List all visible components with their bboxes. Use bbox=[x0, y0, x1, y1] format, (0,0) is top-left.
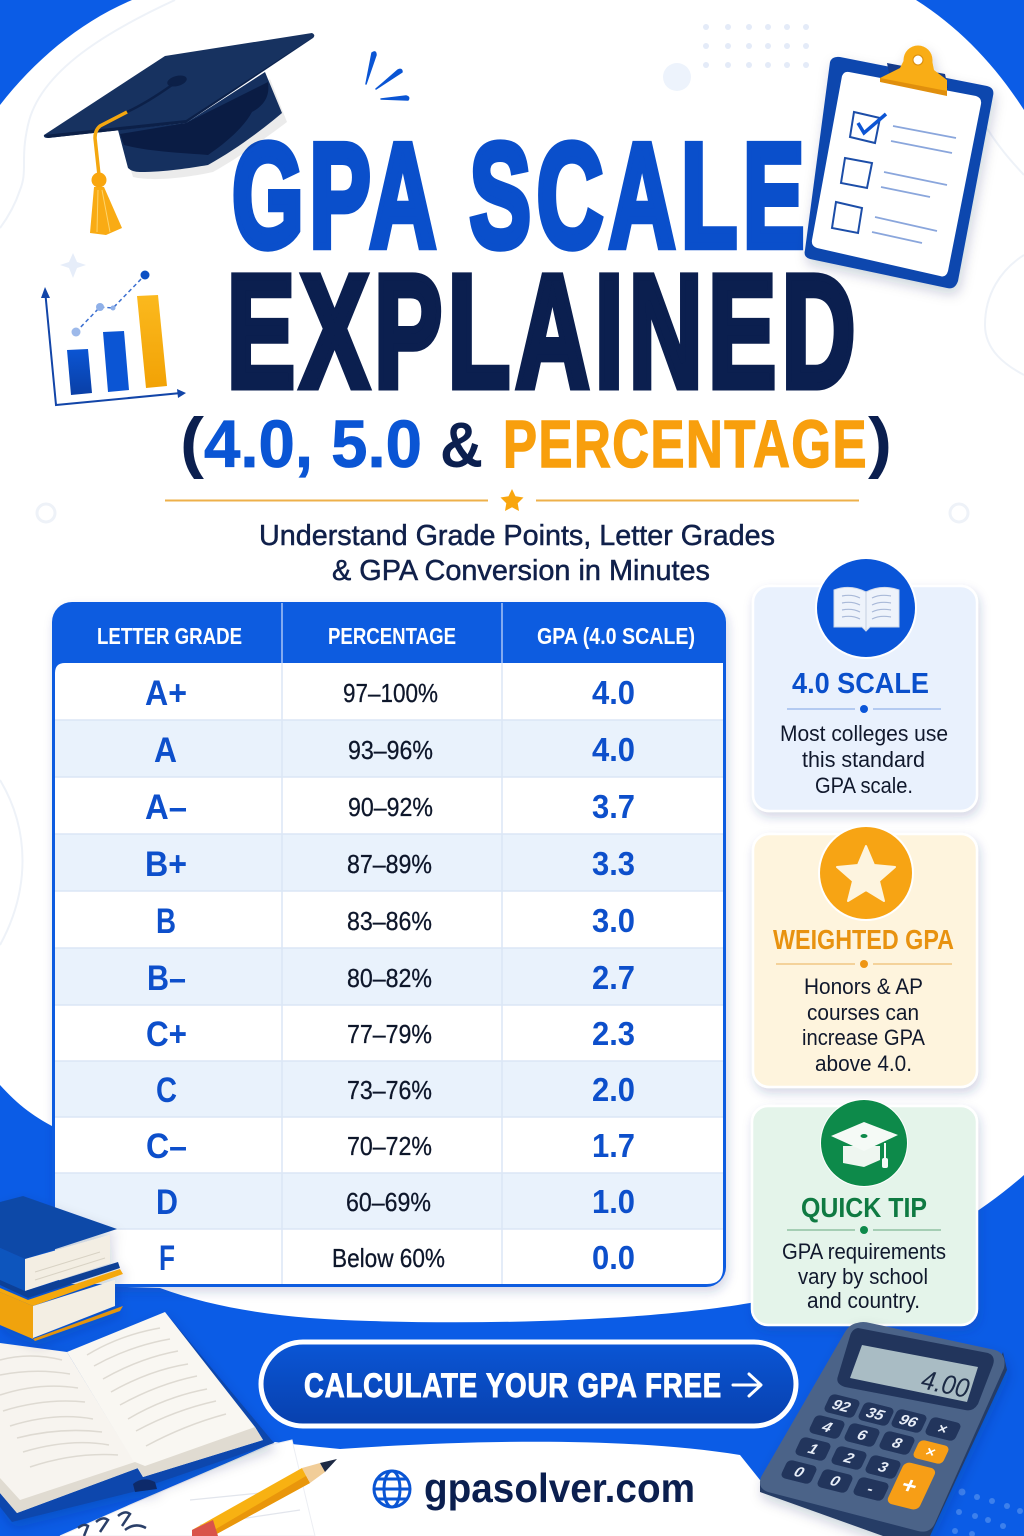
calculator keys: + bbox=[897, 1472, 922, 1500]
title line 3: ) bbox=[868, 404, 892, 480]
grade rows: A– bbox=[145, 788, 187, 827]
table alternating rows bbox=[55, 720, 723, 1229]
calculator keys: 6 bbox=[854, 1427, 870, 1444]
tassel bbox=[90, 112, 127, 235]
title line 3: ( bbox=[180, 404, 204, 480]
grade rows: A bbox=[154, 731, 177, 770]
background: faint decorative swirls bbox=[0, 0, 1024, 945]
grade rows: 4.0 bbox=[592, 731, 635, 768]
panel: quick tip bbox=[752, 1099, 977, 1325]
icon: clipboard bbox=[805, 46, 993, 288]
icon: calculator bbox=[760, 1322, 1007, 1536]
panel: weighted GPA: increase GPA bbox=[802, 1025, 925, 1050]
calculator keys: - bbox=[864, 1481, 876, 1498]
panel: weighted GPA: WEIGHTED GPA bbox=[773, 924, 954, 955]
icon: bar chart bbox=[41, 270, 186, 405]
grade rows: 97–100% bbox=[343, 678, 438, 708]
calculator keys: 96 bbox=[896, 1412, 921, 1431]
subtitle: Understand Grade Points, Letter Grades bbox=[259, 520, 775, 552]
panel: 4.0 scale: GPA scale. bbox=[815, 773, 913, 798]
calculator keys: 92 bbox=[829, 1397, 854, 1416]
icon: notebook and pencil bbox=[60, 1440, 337, 1536]
calculator keys: 0 bbox=[791, 1464, 807, 1481]
grade rows: 2.7 bbox=[592, 959, 635, 996]
table header bbox=[97, 623, 695, 649]
title line 3 bbox=[180, 404, 892, 482]
table header: PERCENTAGE bbox=[328, 623, 456, 649]
calculator keys: 3 bbox=[875, 1459, 891, 1476]
calculator keys: 4 bbox=[818, 1419, 835, 1436]
grade rows bbox=[145, 674, 635, 1278]
panel: 4.0 scale: Most colleges use bbox=[780, 721, 948, 746]
arrow bbox=[733, 1374, 761, 1396]
icon: graduation cap bbox=[44, 33, 315, 235]
background: blue top-right corner bbox=[916, 0, 1024, 110]
calculator keys: × bbox=[922, 1444, 938, 1461]
call to action button bbox=[261, 1342, 796, 1426]
icon: open book bbox=[0, 1312, 274, 1522]
grade rows: 73–76% bbox=[347, 1075, 432, 1105]
icon: star badge bbox=[818, 825, 914, 921]
grade rows: 4.0 bbox=[592, 674, 635, 711]
subtitle: & GPA Conversion in Minutes bbox=[332, 555, 710, 587]
background: blue bottom wave bbox=[0, 1085, 1024, 1536]
icon: stacked books bbox=[0, 1196, 123, 1341]
grade rows: 90–92% bbox=[348, 792, 433, 822]
grade rows: F bbox=[159, 1239, 175, 1278]
table panel bbox=[52, 602, 726, 1287]
grade rows: 83–86% bbox=[347, 906, 432, 936]
grade rows: B bbox=[156, 902, 176, 941]
calculator keys: 0 bbox=[827, 1473, 843, 1490]
grade rows: C bbox=[156, 1071, 177, 1110]
grade rows: 1.0 bbox=[592, 1183, 635, 1220]
grade rows: 2.3 bbox=[592, 1015, 635, 1052]
grade rows: 60–69% bbox=[346, 1187, 431, 1217]
calculator keys: 2 bbox=[840, 1450, 857, 1467]
website: globe icon and url: gpasolver.com bbox=[424, 1465, 695, 1511]
icon: book badge bbox=[815, 557, 917, 659]
grade rows: Below 60% bbox=[332, 1243, 445, 1273]
icon: pale star bbox=[60, 253, 86, 278]
grade rows: C+ bbox=[146, 1015, 187, 1054]
panel: quick tip: and country. bbox=[807, 1288, 920, 1313]
panel: weighted GPA: courses can bbox=[807, 1000, 919, 1025]
grade rows: 3.3 bbox=[592, 845, 635, 882]
grade rows: 3.7 bbox=[592, 788, 635, 825]
grade rows: 2.0 bbox=[592, 1071, 635, 1108]
calculator keys: 35 bbox=[863, 1405, 888, 1424]
panel: quick tip: QUICK TIP bbox=[801, 1192, 927, 1223]
calculator keys: 8 bbox=[889, 1435, 905, 1452]
calculator screen bbox=[850, 1345, 978, 1404]
grade rows: 0.0 bbox=[592, 1239, 635, 1276]
panel: quick tip: GPA requirements bbox=[782, 1239, 946, 1264]
subtitle bbox=[259, 520, 775, 587]
panel: 4.0 scale: this standard bbox=[802, 747, 925, 772]
title line 3: PERCENTAGE bbox=[503, 407, 868, 482]
title line 3: 4.0, 5.0 bbox=[204, 407, 422, 482]
panel: weighted GPA: above 4.0. bbox=[815, 1051, 912, 1076]
grade rows: 77–79% bbox=[347, 1019, 432, 1049]
clipboard checklist bbox=[832, 112, 956, 243]
calculator keys bbox=[780, 1393, 962, 1511]
calculator screen: 4.00 bbox=[919, 1365, 972, 1404]
title line 3: & bbox=[440, 409, 483, 481]
calculator keys: 1 bbox=[805, 1441, 821, 1458]
grade rows: 93–96% bbox=[348, 735, 433, 765]
grade rows: C– bbox=[146, 1127, 187, 1166]
icon: sparks bbox=[366, 52, 409, 100]
calculator keys: × bbox=[934, 1421, 950, 1438]
pencil bbox=[192, 1459, 337, 1536]
panel: 4.0 scale bbox=[753, 557, 977, 811]
background: blue top-left corner bbox=[0, 0, 132, 105]
panel: 4.0 scale: 4.0 SCALE bbox=[792, 668, 929, 700]
grade rows: 87–89% bbox=[347, 849, 432, 879]
blue book bbox=[0, 1196, 120, 1298]
panel: weighted GPA: Honors & AP bbox=[804, 974, 923, 999]
grade rows: B+ bbox=[145, 845, 187, 884]
call to action button: CALCULATE YOUR GPA FREE bbox=[304, 1367, 722, 1405]
grade rows: 70–72% bbox=[347, 1131, 432, 1161]
grade rows: D bbox=[156, 1183, 178, 1222]
decorative dots bottom right bbox=[952, 1488, 1023, 1536]
notebook spiral bbox=[78, 1512, 146, 1536]
icon: grad cap badge bbox=[820, 1099, 908, 1187]
clipboard clip bbox=[880, 46, 948, 96]
grade rows: B– bbox=[147, 959, 186, 998]
panel: weighted GPA bbox=[753, 825, 977, 1087]
orange book bbox=[0, 1269, 123, 1341]
grade rows: 1.7 bbox=[592, 1127, 635, 1164]
grade rows: A+ bbox=[145, 674, 187, 713]
decorative dot grid bbox=[663, 24, 809, 91]
panel: quick tip: vary by school bbox=[798, 1264, 928, 1289]
divider with star bbox=[165, 489, 859, 511]
table header: LETTER GRADE bbox=[97, 623, 242, 649]
table header: GPA (4.0 SCALE) bbox=[537, 623, 695, 649]
grade rows: 3.0 bbox=[592, 902, 635, 939]
grade rows: 80–82% bbox=[347, 963, 432, 993]
